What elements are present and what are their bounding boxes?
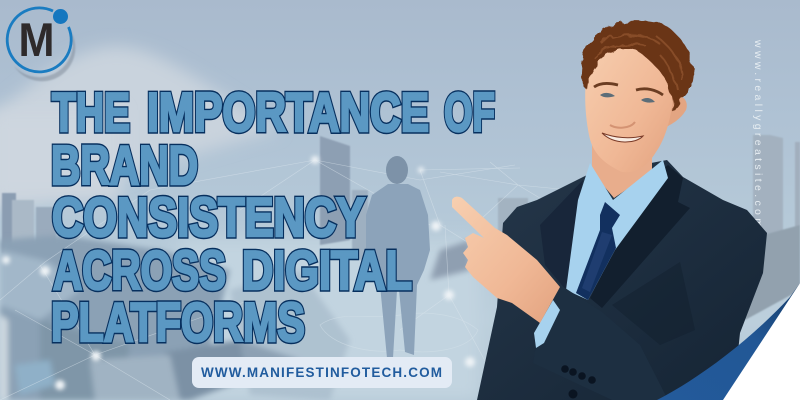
person pointing [452,20,767,400]
glow nodes [2,156,475,390]
title: BRAND [51,134,198,196]
ear [664,95,687,128]
title: IMPORTANCE [147,81,429,143]
buttons [561,365,596,398]
title: ACROSS [53,239,226,301]
hand [452,197,560,323]
mouth [602,133,643,142]
nose [610,122,635,128]
corner ribbon [657,283,800,400]
title: BRAND [51,134,198,196]
brows [594,83,663,95]
vertical website text: www.reallygreatsite.com [752,39,764,227]
distant towers [2,135,800,320]
sleeve [533,286,668,400]
title: CONSISTENCY [52,186,365,248]
title: DIGITAL [242,239,412,301]
shirt cuff [534,300,560,348]
title: THE [52,81,130,143]
title: IMPORTANCE [147,81,429,143]
logo letter M: M [18,13,54,66]
title: PLATFORMS [51,291,305,353]
head [582,20,693,172]
URL pill: WWW.MANIFESTINFOTECH.COM [201,365,442,380]
shirt [566,160,668,300]
hair highlights [594,35,682,90]
URL pill [192,357,452,388]
city foreground [0,235,470,400]
title: OF [444,81,495,143]
neck [592,140,652,198]
title: CONSISTENCY [52,186,365,248]
back-view figure in background [366,156,430,358]
logo [7,8,75,81]
title: DIGITAL [242,239,412,301]
map outline on the floor [320,313,478,352]
title: OF [444,81,495,143]
title: ACROSS [53,239,226,301]
jacket [477,160,767,400]
title: PLATFORMS [51,291,305,353]
network lines [0,160,570,400]
title [51,81,495,353]
hair [582,20,693,112]
eyes [600,93,655,103]
tie [576,202,620,300]
title: THE [52,81,130,143]
